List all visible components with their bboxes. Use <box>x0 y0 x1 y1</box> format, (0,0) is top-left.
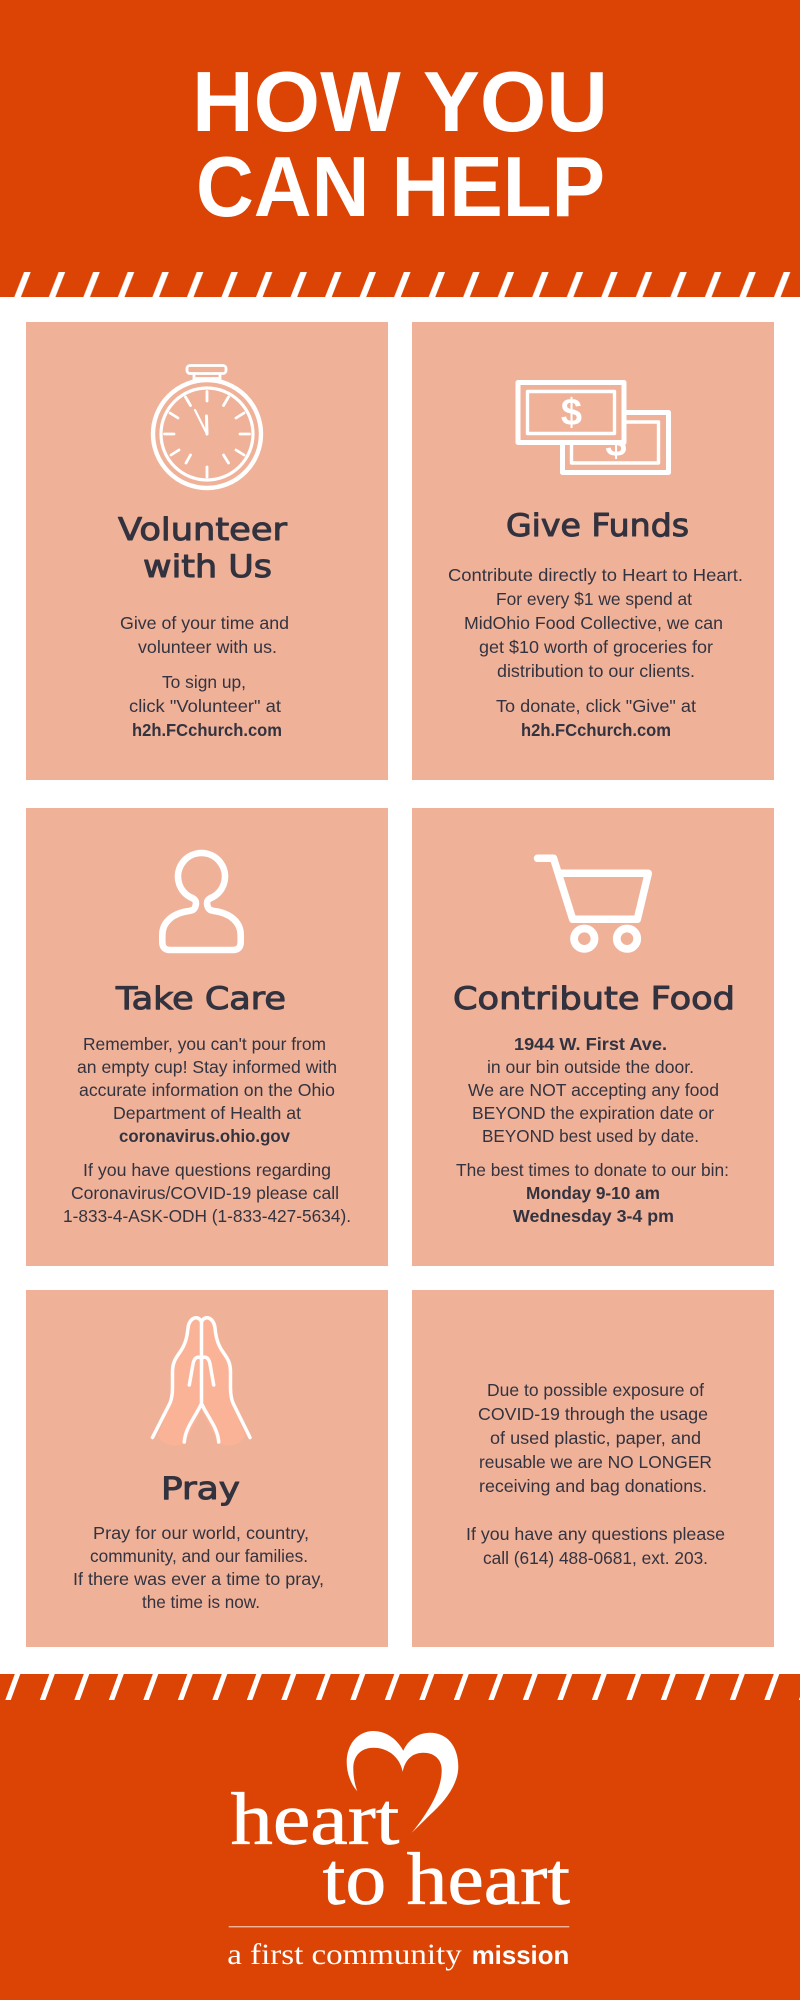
text block: receiving and bag donations. <box>479 1476 707 1496</box>
text block: volunteer with us. <box>138 637 277 657</box>
icon: praying hands <box>152 1318 250 1445</box>
text block: h2h.FCchurch.com <box>132 720 282 740</box>
text block <box>63 1034 351 1226</box>
text block: call (614) 488-0681, ext. 203. <box>483 1548 708 1568</box>
title: CAN HELP <box>196 140 605 235</box>
heading: Give Funds <box>506 508 689 544</box>
heading: Take Care <box>115 981 286 1017</box>
text block: accurate information on the Ohio <box>79 1080 335 1100</box>
tagline: a first community <box>227 1938 462 1971</box>
text block: COVID-19 through the usage <box>478 1404 708 1424</box>
text block: of used plastic, paper, and <box>490 1428 701 1448</box>
logo: heart <box>231 1779 400 1861</box>
text block: To donate, click "Give" at <box>496 696 696 716</box>
icon: money: $ <box>561 392 582 434</box>
tagline <box>227 1938 569 1971</box>
text block: The best times to donate to our bin: <box>456 1160 729 1180</box>
text block: Pray for our world, country, <box>93 1523 309 1543</box>
text block <box>448 565 743 740</box>
panel: pray <box>26 1290 388 1647</box>
text block: Give of your time and <box>120 613 289 633</box>
text block: distribution to our clients. <box>497 661 695 681</box>
text block: If there was ever a time to pray, <box>73 1569 324 1589</box>
heading: Volunteer <box>118 512 287 548</box>
text block: get $10 worth of groceries for <box>479 637 713 657</box>
logo: to heart <box>323 1839 570 1921</box>
text block: Monday 9-10 am <box>526 1183 660 1203</box>
text block: Remember, you can't pour from <box>83 1034 326 1054</box>
icon: money <box>518 382 668 472</box>
text block: Coronavirus/COVID-19 please call <box>71 1183 339 1203</box>
text block: the time is now. <box>142 1592 260 1612</box>
text block: To sign up, <box>162 672 246 692</box>
text block: an empty cup! Stay informed with <box>77 1057 337 1077</box>
icon: stopwatch <box>153 366 261 488</box>
panel: notice <box>412 1290 774 1647</box>
text block: Wednesday 3-4 pm <box>513 1206 674 1226</box>
text block: coronavirus.ohio.gov <box>119 1126 290 1146</box>
text block <box>73 1523 324 1612</box>
text block: click "Volunteer" at <box>129 696 281 716</box>
text block: BEYOND the expiration date or <box>472 1103 714 1123</box>
panel: give funds <box>412 322 774 780</box>
heading: Pray <box>161 1471 240 1507</box>
text block: 1944 W. First Ave. <box>514 1034 667 1054</box>
text block: h2h.FCchurch.com <box>521 720 671 740</box>
heading <box>118 512 287 585</box>
text block: Department of Health at <box>113 1103 301 1123</box>
heading: Contribute Food <box>453 981 735 1017</box>
tagline: mission <box>472 1940 569 1970</box>
text block <box>120 613 289 740</box>
text block: If you have questions regarding <box>83 1160 331 1180</box>
title: HOW YOU <box>192 55 608 150</box>
panel: contribute food <box>412 808 774 1266</box>
text block: Due to possible exposure of <box>487 1380 704 1400</box>
title <box>192 55 608 235</box>
icon: money: $ <box>605 423 627 465</box>
text block: BEYOND best used by date. <box>482 1126 699 1146</box>
text block: MidOhio Food Collective, we can <box>464 613 723 633</box>
text block: reusable we are NO LONGER <box>479 1452 712 1472</box>
panel: volunteer <box>26 322 388 780</box>
text block: For every $1 we spend at <box>496 589 692 609</box>
text block: Contribute directly to Heart to Heart. <box>448 565 743 585</box>
icon: shopping cart <box>538 858 648 949</box>
icon: person <box>162 853 241 950</box>
text block: 1-833-4-ASK-ODH (1-833-427-5634). <box>63 1206 351 1226</box>
text block: community, and our families. <box>90 1546 308 1566</box>
text block: If you have any questions please <box>466 1524 725 1544</box>
icon: heart <box>347 1731 458 1833</box>
text block: in our bin outside the door. <box>487 1057 694 1077</box>
text block <box>466 1380 725 1568</box>
text block: We are NOT accepting any food <box>468 1080 719 1100</box>
text block <box>456 1034 729 1226</box>
panel: take care <box>26 808 388 1266</box>
footer banner <box>0 1674 800 2000</box>
heading: with Us <box>143 549 272 585</box>
logo <box>227 1731 570 1971</box>
header banner <box>0 0 800 297</box>
